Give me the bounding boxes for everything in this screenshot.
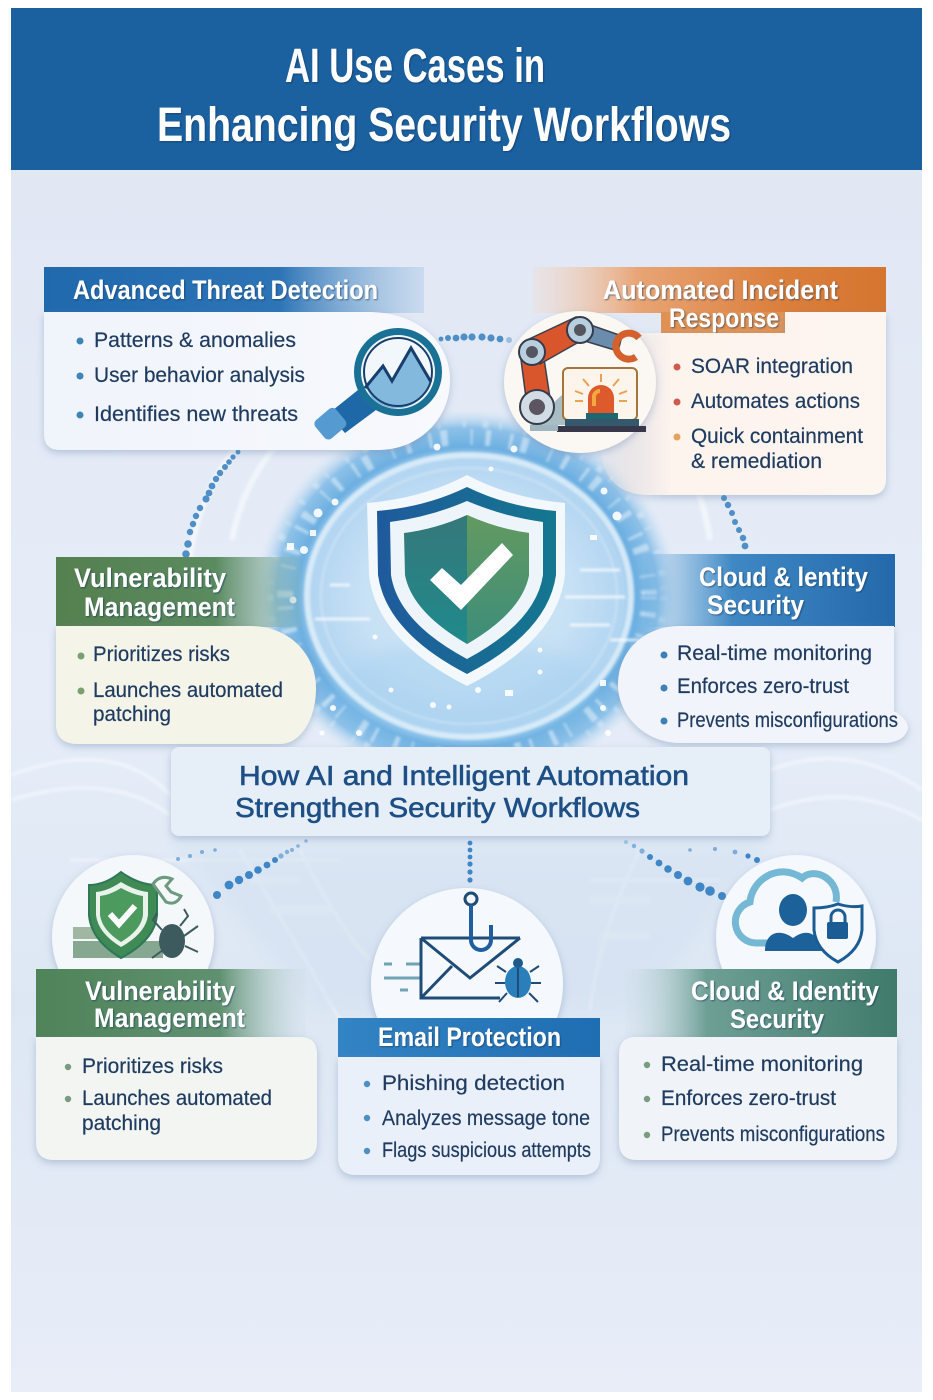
heading bar	[36, 969, 306, 1037]
bullet list: Prioritizes risks	[93, 642, 230, 666]
heading bar: Vulnerability	[85, 976, 235, 1006]
bullet list: Quick containment	[691, 424, 863, 448]
card body	[619, 1037, 897, 1160]
icon: central shield with check mark	[367, 475, 565, 686]
bullet list: patching	[82, 1111, 161, 1135]
heading bar: Advanced Threat Detection	[73, 275, 378, 305]
icon: robot arm with alarm	[504, 311, 656, 453]
bullet list: Automates actions	[691, 389, 860, 413]
bullet list: Launches automated	[93, 678, 283, 702]
bullet list: Prevents misconfigurations	[661, 1122, 885, 1146]
central glow with circuit ring	[190, 400, 710, 785]
heading bar	[338, 1018, 600, 1057]
bullet list: Enforces zero-trust	[661, 1086, 836, 1110]
bullet list: & remediation	[691, 449, 822, 473]
connector: dotted lines from callout to bottom cards	[176, 839, 760, 900]
heading bar	[56, 557, 301, 627]
bullet list	[78, 642, 283, 726]
title: Enhancing Security Workflows	[157, 99, 731, 152]
card body	[56, 626, 316, 744]
connector: dotted arc between top cards	[439, 333, 512, 343]
panel: cloud and identity security (bottom)	[619, 855, 897, 1160]
bullet list: patching	[93, 702, 171, 726]
heading bar: Management	[94, 1003, 245, 1033]
heading bar: Cloud & Identity	[691, 976, 879, 1006]
bullet list	[660, 641, 898, 732]
bullet list: Launches automated	[82, 1086, 272, 1110]
bullet list: Real-time monitoring	[661, 1052, 863, 1076]
bullet list: Flags suspicious attempts	[382, 1138, 591, 1162]
bullet list: Phishing detection	[382, 1071, 565, 1095]
bullet list: Enforces zero-trust	[677, 674, 849, 698]
heading bar	[645, 554, 895, 627]
callout: how AI and intelligent automation strengthen workflows	[171, 747, 770, 836]
panel: email protection	[338, 888, 600, 1175]
bullet list: Prioritizes risks	[82, 1054, 223, 1078]
card body	[618, 626, 908, 743]
bullet list	[674, 354, 863, 473]
title: AI Use Cases in	[285, 40, 545, 93]
icon: shield wrench and bug	[52, 855, 214, 1019]
heading bar	[44, 267, 424, 313]
bullet list: Analyzes message tone	[382, 1106, 590, 1130]
bullet list	[65, 1054, 272, 1135]
icon: magnifying glass	[312, 328, 442, 442]
panel: vulnerability management (middle)	[56, 557, 316, 744]
heading bar: Security	[730, 1004, 824, 1034]
bullet list	[644, 1052, 885, 1146]
heading bar: Security	[707, 590, 804, 620]
bullet list: Patterns & anomalies	[94, 328, 296, 352]
connector: dotted arc from threat detection down to vulnerability	[182, 450, 240, 558]
panel: cloud and identity security (middle)	[618, 554, 908, 743]
card body	[44, 312, 450, 450]
bullet list: User behavior analysis	[94, 363, 305, 387]
bullet list	[76, 328, 305, 426]
panel: advanced threat detection	[44, 267, 450, 450]
soft tint behind lower connectors	[170, 845, 770, 1010]
heading bar: Cloud & lentity	[699, 562, 868, 592]
card body	[600, 312, 886, 495]
heading bar: Management	[84, 592, 235, 622]
callout: how AI and intelligent automation strengthen workflows: Strengthen Security Workflows	[235, 792, 640, 823]
header banner	[11, 8, 922, 170]
heading bar: Response	[669, 303, 779, 333]
icon: phishing hook envelope and bug	[371, 888, 563, 1080]
panel: automated incident response	[504, 267, 886, 495]
heading bar: Vulnerability	[74, 563, 226, 593]
bullet list: Identifies new threats	[94, 402, 298, 426]
bullet list: Real-time monitoring	[677, 641, 872, 665]
heading bar: Automated Incident	[603, 275, 838, 305]
bullet list: Prevents misconfigurations	[677, 708, 898, 732]
icon: cloud user and lock shield	[716, 855, 876, 1019]
card body	[338, 1057, 600, 1175]
title	[157, 40, 731, 152]
faint circuit background lines	[11, 759, 922, 1020]
card body	[36, 1037, 317, 1160]
heading bar	[533, 267, 886, 333]
heading bar: Email Protection	[378, 1022, 561, 1052]
bullet list: SOAR integration	[691, 354, 853, 378]
callout: how AI and intelligent automation strengthen workflows: How AI and Intelligent Automation	[239, 760, 689, 791]
panel: vulnerability management (bottom)	[36, 855, 317, 1160]
heading bar	[625, 969, 897, 1037]
bullet list	[364, 1071, 591, 1162]
connector: dotted arc from incident response to cloud card	[721, 495, 748, 549]
